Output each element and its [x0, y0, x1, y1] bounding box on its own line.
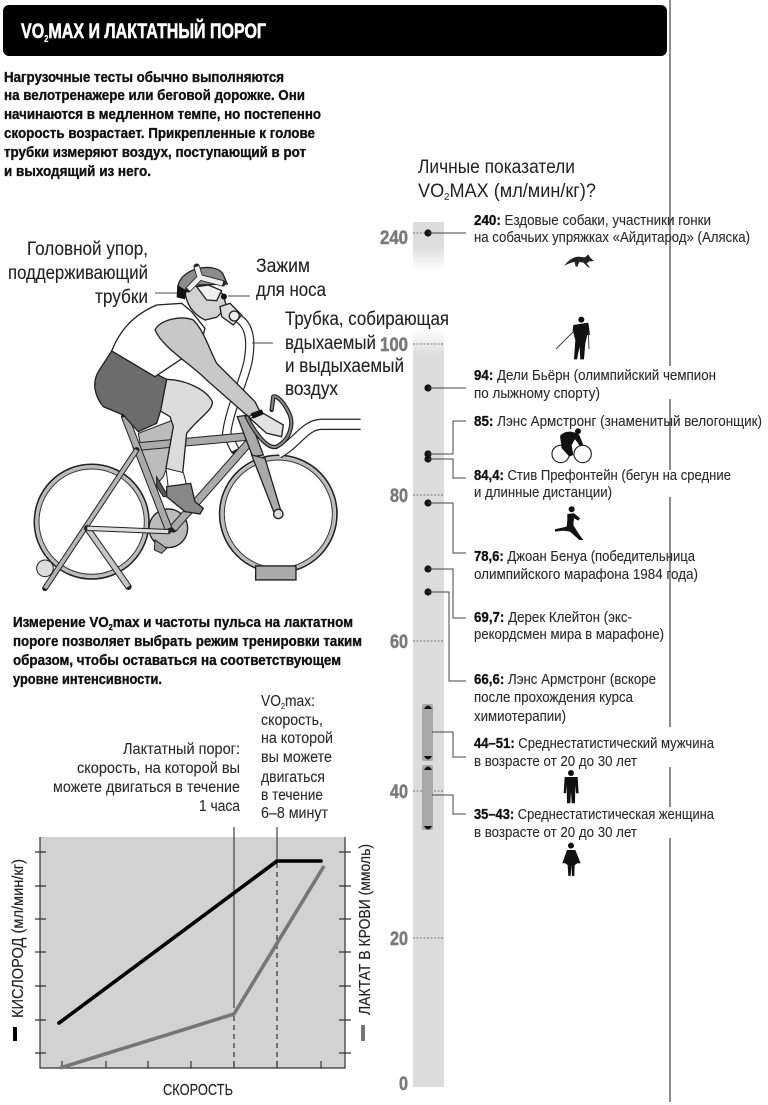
labels: bike callouts: Трубка, собирающая	[285, 309, 449, 330]
entry: Daehlie: 94: Дели Бьёрн (олимпийский чемпион	[474, 368, 716, 384]
entry: sled dogs: 240: Ездовые собаки, участники гонки	[474, 213, 711, 229]
oxygen line	[59, 861, 321, 1023]
entry: average woman: 35–43: Среднестатистическая женщина	[474, 807, 715, 823]
range bars	[422, 704, 433, 830]
intro text block: и выходящий из него.	[4, 164, 151, 180]
scale numbers: 20	[390, 929, 408, 950]
scale heading: MAX (мл/мин/кг)?	[449, 181, 596, 202]
far leg	[138, 420, 175, 487]
lactate threshold label: Лактатный порог:	[123, 741, 240, 758]
VO2max label: вы можете	[261, 749, 332, 766]
arm	[155, 318, 260, 417]
entry: Prefontaine: 84,4: Стив Префонтейн (бегун на средние	[474, 468, 731, 484]
VO2max label: на которой	[261, 730, 333, 747]
nose clip	[221, 294, 227, 300]
scale heading: VO	[418, 181, 445, 202]
labels: bike callouts: Зажим	[256, 256, 310, 277]
VO2max label: 2	[281, 702, 285, 711]
title banner: 2	[44, 34, 49, 45]
entry: Prefontaine: и длинные дистанции)	[474, 485, 612, 501]
labels: bike callouts: вдыхаемый	[285, 333, 376, 354]
data points	[424, 229, 432, 596]
intro text block: скорость возрастает. Прикрепленные к голове	[4, 126, 315, 142]
icon: dog	[564, 254, 594, 267]
saddle side shorts	[95, 351, 167, 432]
explanation text: образом, чтобы оставаться на соответствующем	[13, 653, 341, 669]
intro text block: Нагрузочные тесты обычно выполняются	[4, 70, 284, 86]
entry: Armstrong after chemotherapy: 66,6: Лэнс Армстронг (вскоре	[474, 672, 656, 688]
lactate threshold label	[53, 741, 240, 815]
entry: Prefontaine	[474, 468, 731, 501]
explanation text: уровне интенсивности.	[13, 672, 162, 688]
entry: average woman	[474, 807, 715, 841]
lactate threshold label: скорость, на которой вы	[77, 760, 240, 777]
vertical VO2max scale	[380, 222, 466, 1095]
explanation text: 2	[109, 623, 113, 632]
leader lines	[428, 233, 466, 814]
icon: man	[564, 770, 579, 803]
entry: average man: 44–51: Среднестатистический мужчина	[474, 736, 715, 752]
scale heading: Личные показатели	[418, 157, 575, 178]
labels: bike callouts: Головной упор,	[27, 239, 148, 260]
entry: Daehlie: по лыжному спорту)	[474, 386, 600, 402]
line chart: oxygen and lactate vs speed	[10, 827, 374, 1099]
icon: cyclist	[552, 428, 591, 463]
explanation text: max и частоты пульса на лактатном	[113, 615, 353, 631]
entry: Benoit: олимпийского марафона 1984 года)	[474, 567, 698, 583]
icon: skier	[556, 317, 590, 359]
labels: bike callouts: и выдыхаемый	[285, 356, 404, 377]
labels: bike callouts: трубки	[95, 287, 148, 308]
jersey	[112, 303, 205, 377]
hand and watch	[250, 409, 283, 437]
marker lines	[234, 827, 277, 1066]
icon: runner	[555, 506, 583, 540]
scale numbers: 240	[380, 228, 408, 249]
entry: Clayton: 69,7: Дерек Клейтон (экс-	[474, 610, 632, 626]
right axis title: ЛАКТАТ В КРОВИ (ммоль)	[357, 844, 374, 1015]
scale numbers: 80	[390, 486, 408, 507]
illustration: cyclist on trainer	[34, 267, 362, 588]
head and face	[185, 285, 227, 320]
entry: average man	[474, 727, 715, 770]
title banner: MAX И ЛАКТАТНЫЙ ПОРОГ	[48, 19, 266, 43]
lactate line	[60, 866, 324, 1068]
entry: Benoit: 78,6: Джоан Бенуа (победительница	[474, 549, 696, 565]
VO2max label: 6–8 минут	[261, 805, 328, 822]
scale numbers: 100	[380, 335, 408, 356]
large hose	[278, 424, 362, 453]
head support back pad	[177, 285, 187, 299]
front stand	[256, 566, 296, 580]
explanation text: пороге позволяет выбрать режим тренировки таким	[13, 634, 362, 650]
mouthpiece	[220, 303, 242, 325]
entry: sled dogs	[472, 212, 754, 246]
x axis title: СКОРОСТЬ	[163, 1082, 233, 1099]
scale numbers: 60	[390, 632, 408, 653]
head straps	[188, 267, 223, 289]
left axis title: КИСЛОРОД (мл/мин/кг)	[10, 859, 27, 1018]
near leg	[160, 379, 212, 473]
lactate threshold label: можете двигаться в течение	[53, 779, 240, 796]
entry: Benoit	[474, 549, 698, 583]
intro text block: на велотренажере или беговой дорожке. Они	[4, 88, 305, 104]
VO2max label: VO	[261, 693, 283, 710]
labels: bike callouts: поддерживающий	[8, 263, 148, 284]
scale numbers: 40	[390, 782, 408, 803]
entry: Armstrong after chemotherapy	[474, 672, 656, 725]
sock	[166, 468, 187, 488]
title banner: VO	[21, 20, 51, 43]
goggles	[197, 285, 222, 301]
title banner	[3, 5, 667, 56]
entry: Clayton: рекордсмен мира в марафоне)	[474, 627, 664, 643]
entry: average woman: в возрасте от 20 до 30 лет	[474, 825, 637, 841]
scale numbers	[380, 228, 408, 1095]
trainer stand	[37, 450, 168, 588]
scale numbers: 0	[399, 1074, 408, 1095]
explanation text: Измерение VO	[13, 615, 117, 631]
labels: bike callouts: воздух	[285, 379, 338, 400]
lactate threshold label: 1 часа	[199, 798, 240, 815]
scale heading	[418, 157, 596, 203]
labels: bike callouts: для носа	[256, 280, 326, 301]
rear wheel	[34, 464, 149, 579]
entry: Armstrong after chemotherapy: после прохождения курса	[474, 690, 634, 706]
icon: woman	[562, 843, 581, 876]
intro text block	[4, 70, 321, 180]
intro text block: начинаются в медленном темпе, но постепенно	[4, 107, 321, 123]
VO2max label: скорость,	[261, 712, 323, 729]
handlebar	[247, 396, 291, 447]
explanation text	[13, 615, 362, 688]
shoe	[167, 483, 203, 514]
scale heading: 2	[444, 192, 450, 203]
entry: average man: в возрасте от 20 до 30 лет	[474, 754, 637, 770]
front wheel	[220, 455, 337, 573]
cap	[178, 267, 227, 292]
breathing tube	[227, 317, 250, 450]
VO2max label: max:	[285, 693, 315, 710]
entry: Armstrong after chemotherapy: химиотерапии)	[474, 709, 566, 725]
far foot and crank	[149, 477, 188, 553]
bicycle frame	[125, 415, 283, 528]
labels: bike callouts	[8, 239, 449, 400]
entry: Clayton	[474, 610, 664, 643]
entry: Daehlie	[472, 366, 716, 402]
VO2max label: двигаться	[261, 769, 325, 786]
VO2max label: в течение	[261, 787, 323, 804]
intro text block: трубки измеряют воздух, поступающий в рот	[4, 145, 306, 161]
VO2max label	[261, 693, 333, 822]
